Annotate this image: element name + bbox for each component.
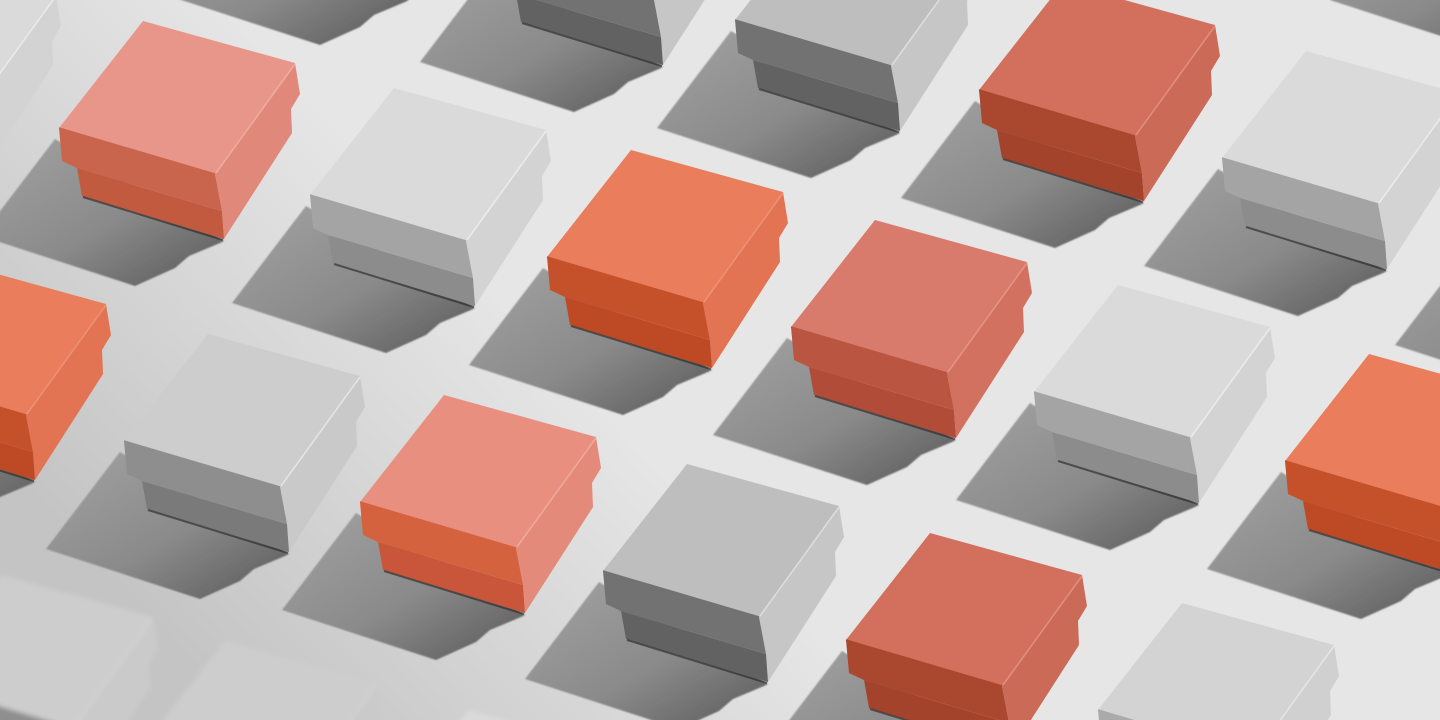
box: light gray bottom right [1020,603,1339,720]
box: gray lower left [46,334,365,599]
box: salmon center right [713,220,1032,485]
box: dark gray upper [657,0,976,178]
box: top dark gray [420,0,739,112]
box: bright orange center [469,150,788,415]
box: light salmon upper left [0,21,300,286]
box: bright orange left edge [0,262,111,527]
box: blurred foreground left [0,575,158,720]
box: blurred foreground middle [141,641,382,720]
box: right edge shadow [1395,130,1440,395]
box: bright orange right edge [1207,354,1440,619]
box: light gray upper right [1144,51,1440,316]
box: light gray upper middle [232,88,551,353]
box: hidden top row, shadow [166,0,485,45]
box: muted salmon bottom [768,533,1087,720]
box: dark gray lower [525,464,844,720]
box: blurred foreground edge [385,710,626,720]
box: top-left light gray [0,0,61,218]
box: top-right corner shadow [1330,0,1440,50]
box: muted salmon upper right [901,0,1220,248]
box: pink lower middle [282,395,601,660]
box: light gray right [956,285,1275,550]
